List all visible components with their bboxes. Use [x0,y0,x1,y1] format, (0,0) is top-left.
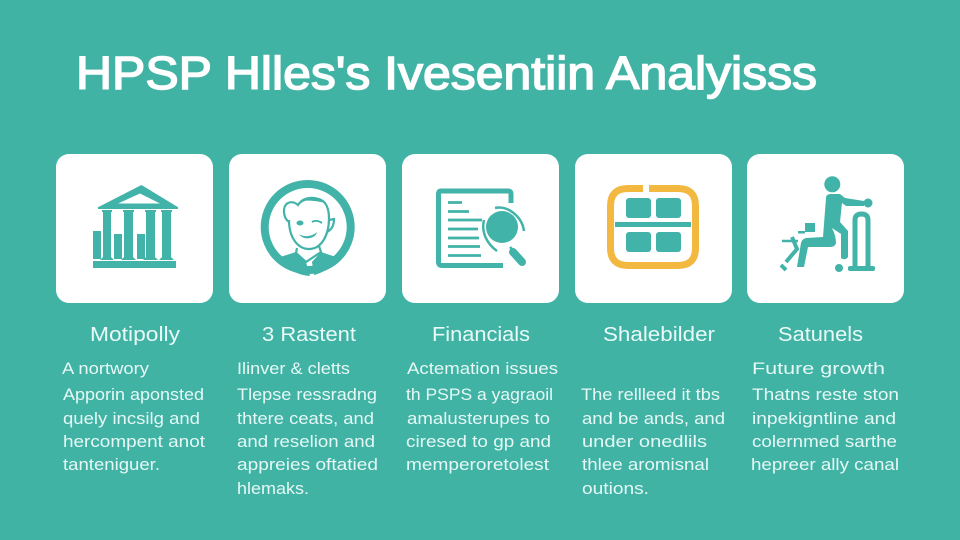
text block: Satunels: inpekigntline and [752,409,896,428]
heading: Shalebilder: Shalebilder [603,324,715,346]
text block: Shalebilder: under onedlils [582,432,707,451]
text block: 3 Rastent: Tlepse ressradng [237,385,377,404]
text block: Financials: memperoretolest [406,455,549,474]
text block: Motipolly [62,359,205,474]
text block: Motipolly: quely incsilg and [63,409,200,428]
text block: Motipolly: tanteniguer. [63,455,160,474]
text block: Shalebilder: and be ands, and [582,409,725,428]
panel: 3 Rastent [229,154,386,498]
text block: Satunels: colernmed sarthe [752,432,897,451]
text block: Financials: ciresed to gp and [406,432,551,451]
text block: 3 Rastent: hlemaks. [237,479,309,498]
text block: Motipolly: Apporin aponsted [63,385,204,404]
text block: 3 Rastent: appreies oftatied [237,455,378,474]
panel: Satunels [747,154,904,474]
text block: Shalebilder: outions. [582,479,649,498]
text block: Satunels: hepreer ally canal [751,455,899,474]
text block: Shalebilder: The rellleed it tbs [581,385,720,404]
text block: 3 Rastent: thtere ceats, and [237,409,374,428]
text block: 3 Rastent [237,359,378,498]
text block: Motipolly: A nortwory [62,359,150,378]
card: Motipolly [56,154,213,303]
heading: Financials: Financials [432,324,530,346]
panel: Motipolly [56,154,213,474]
text block: Satunels [751,359,899,474]
text block: Financials: amalusterupes to [407,409,550,428]
text block: Shalebilder [581,385,725,498]
text block: Satunels: Future growth [752,359,885,378]
icon: person portrait in ring [265,184,351,276]
icon: bank building with bars [93,185,178,268]
heading: Satunels: Satunels [778,324,863,346]
icon: figure with exercise frame [781,176,875,272]
panel: Financials [402,154,559,474]
text block: Shalebilder: thlee aromisnal [582,455,709,474]
title: HPSP Hlles's Ivesentiin Analyisss [76,47,817,99]
card: Shalebilder [575,154,732,303]
text block: Financials: th PSPS a yagraoil [406,385,553,404]
text block: Motipolly: hercompent anot [63,432,205,451]
card: Financials [402,154,559,303]
card: Satunels [747,154,904,303]
icon: yellow frame with four blocks [610,188,696,266]
text block: Financials: Actemation issues [407,359,558,378]
text block: 3 Rastent: Ilinver & cletts [237,359,350,378]
text block: Financials [406,359,558,474]
icon: document with magnifier [438,191,524,266]
text block: Satunels: Thatns reste ston [752,385,899,404]
heading: Motipolly: Motipolly [90,324,180,346]
heading: 3 Rastent: 3 Rastent [262,324,356,346]
text block: 3 Rastent: and reselion and [237,432,375,451]
card: 3 Rastent [229,154,386,303]
panel: Shalebilder [575,154,732,498]
